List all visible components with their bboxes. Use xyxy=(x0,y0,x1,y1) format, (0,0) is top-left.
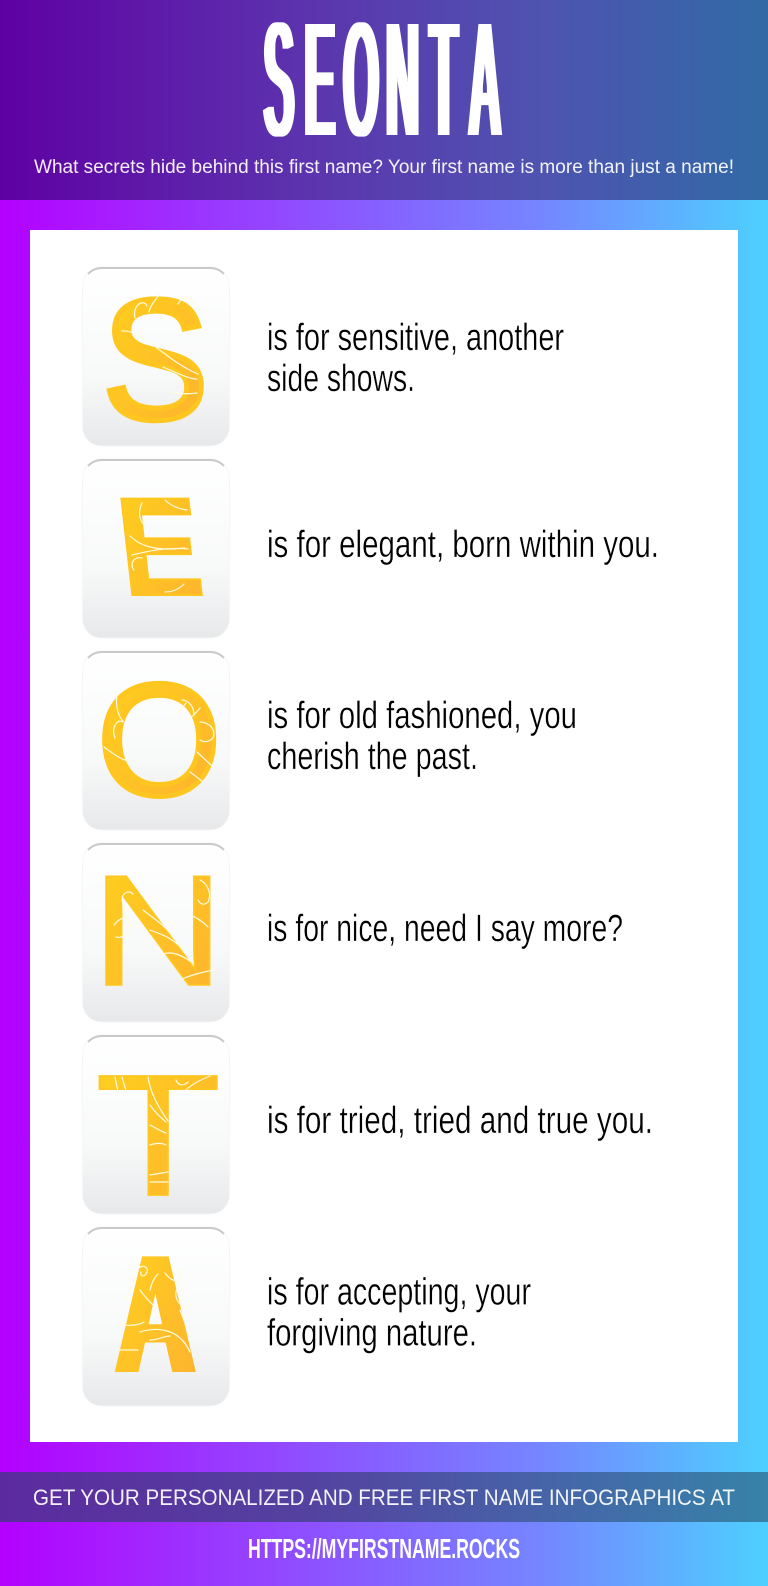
footer band xyxy=(0,1472,768,1522)
row E xyxy=(82,459,659,638)
text A xyxy=(267,1272,531,1354)
text A: is for accepting, your xyxy=(267,1272,531,1314)
text O xyxy=(267,695,577,778)
header band xyxy=(0,0,768,200)
icon: letter T: T xyxy=(95,1039,221,1232)
footer text: GET YOUR PERSONALIZED AND FREE FIRST NAME INFOGRAPHICS AT xyxy=(33,1485,735,1510)
tile T xyxy=(82,1035,230,1214)
text S xyxy=(267,317,564,400)
text T: is for tried, tried and true you. xyxy=(267,1100,653,1142)
text O: cherish the past. xyxy=(267,736,478,778)
tile S xyxy=(82,267,230,446)
row S xyxy=(82,265,564,456)
icon: letter A: A xyxy=(116,1221,195,1409)
text O: is for old fashioned, you xyxy=(267,695,577,737)
text A: forgiving nature. xyxy=(267,1312,477,1354)
row O xyxy=(82,650,577,830)
text N: is for nice, need I say more? xyxy=(267,908,623,950)
tile E xyxy=(82,459,230,638)
icon: letter E: E xyxy=(110,469,210,626)
text S: side shows. xyxy=(267,358,415,400)
text S: is for sensitive, another xyxy=(267,317,564,359)
website link: HTTPS://MYFIRSTNAME.ROCKS xyxy=(248,1533,520,1564)
icon: letter O: O xyxy=(97,650,221,829)
white content panel xyxy=(30,230,738,1442)
tile O xyxy=(82,651,230,830)
tile A xyxy=(82,1227,230,1406)
row T xyxy=(82,1035,653,1232)
row N xyxy=(82,843,623,1022)
icon: letter S: S xyxy=(102,265,209,456)
tile N xyxy=(82,843,230,1022)
text E: is for elegant, born within you. xyxy=(267,524,659,566)
subtitle: What secrets hide behind this first name? Your first name is more than just a name! xyxy=(34,157,734,178)
row A xyxy=(82,1221,531,1409)
icon: letter N: N xyxy=(91,843,225,1019)
